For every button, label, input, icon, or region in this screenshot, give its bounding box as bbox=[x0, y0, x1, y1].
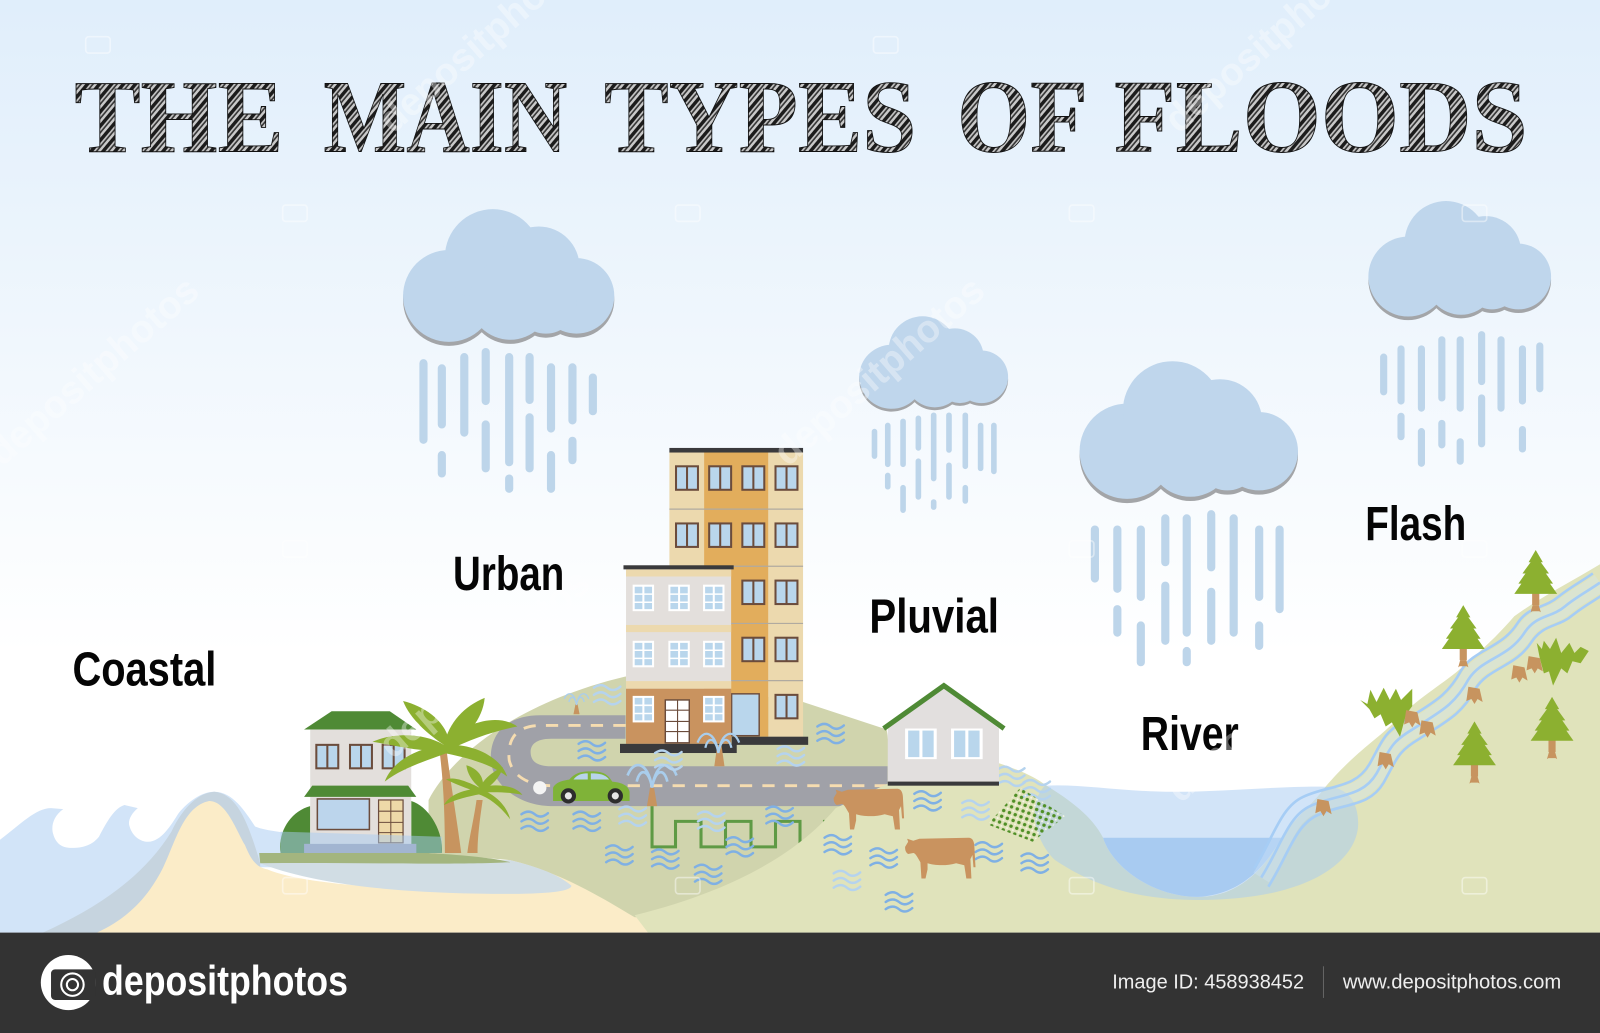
rain cloud: pluvial bbox=[859, 316, 1008, 510]
tall apartment building bbox=[669, 448, 808, 745]
title: FLOODS bbox=[1114, 59, 1528, 175]
label: Urban: Urban bbox=[453, 548, 564, 601]
label: Flash: Flash bbox=[1365, 498, 1466, 551]
pluvial house bbox=[884, 686, 1004, 786]
palm trees bbox=[372, 698, 522, 853]
title bbox=[74, 59, 1528, 175]
back hill bbox=[429, 676, 898, 917]
logo icon bbox=[41, 955, 96, 1010]
awning bbox=[304, 786, 416, 797]
car bbox=[533, 771, 630, 804]
divider bbox=[1323, 966, 1324, 998]
label: Pluvial: Pluvial bbox=[869, 591, 999, 644]
door bbox=[379, 800, 403, 843]
footer bar bbox=[0, 933, 1600, 1033]
exhaust puff bbox=[533, 781, 546, 794]
crop field bbox=[988, 788, 1065, 842]
roof bbox=[304, 711, 416, 730]
rain cloud: flash bbox=[1368, 201, 1551, 463]
coastal wave bbox=[0, 792, 306, 933]
bushes bbox=[280, 801, 442, 853]
sky background bbox=[0, 0, 1600, 653]
road bbox=[491, 715, 888, 806]
rain cloud: river bbox=[1080, 361, 1298, 662]
footer logo: depositphotos bbox=[102, 957, 348, 1004]
pine trees bbox=[1442, 550, 1573, 784]
flood ripples light bbox=[594, 685, 1050, 890]
flash flood stream bbox=[1254, 573, 1600, 887]
wave overlap band bbox=[43, 792, 260, 933]
broken trees and stumps bbox=[1315, 638, 1589, 816]
shoreline puddle bbox=[260, 860, 571, 894]
title: THE bbox=[74, 59, 284, 175]
title: TYPES bbox=[604, 59, 916, 175]
image id: Image ID: 458938452 bbox=[1112, 972, 1304, 994]
watermark: depositphotos bbox=[371, 561, 598, 767]
underground pipe bbox=[652, 806, 847, 847]
flood overlay bbox=[281, 832, 442, 853]
rain cloud: urban bbox=[403, 209, 614, 489]
shore grass bbox=[259, 853, 510, 864]
watermark: depositphotos bbox=[1158, 605, 1386, 811]
label: River: River bbox=[1141, 708, 1239, 761]
label: Coastal: Coastal bbox=[72, 644, 216, 697]
coastal house bbox=[280, 711, 442, 853]
front hill bbox=[635, 564, 1600, 933]
title: MAIN bbox=[323, 59, 567, 175]
title: OF bbox=[957, 59, 1088, 175]
flood ripples dark bbox=[521, 724, 1048, 911]
fountains bbox=[564, 694, 739, 806]
cow 2 bbox=[905, 838, 976, 879]
river basin bbox=[1103, 838, 1282, 897]
footer logo bbox=[41, 955, 348, 1010]
cow 1 bbox=[834, 789, 904, 830]
river flood zone bbox=[1034, 785, 1358, 900]
watermark: depositphotos bbox=[765, 268, 993, 474]
website: www.depositphotos.com bbox=[1342, 972, 1561, 994]
sand beach bbox=[97, 801, 663, 933]
front apartment building bbox=[620, 565, 737, 753]
